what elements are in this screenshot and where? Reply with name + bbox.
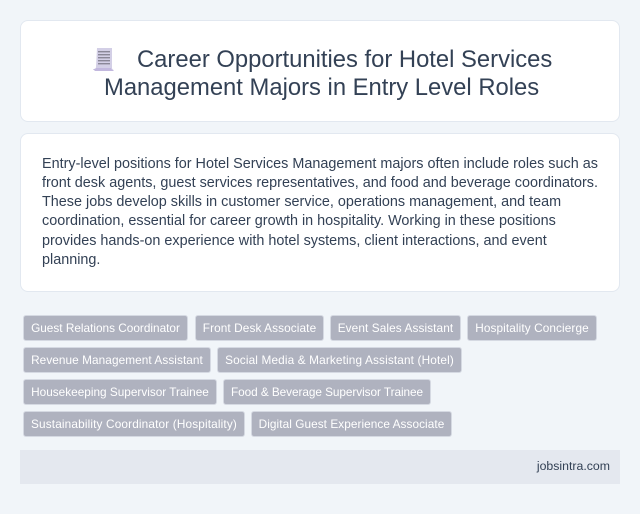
tag: Digital Guest Experience Associate [259, 417, 444, 431]
description text [42, 156, 598, 268]
tag: Revenue Management Assistant [31, 353, 203, 367]
description text: provides hands-on experience with hotel systems, client interactions, and event [42, 233, 547, 249]
tag: Hospitality Concierge [475, 321, 589, 335]
tag [23, 411, 245, 437]
tag [23, 315, 188, 341]
title line 2: Management Majors in Entry Level Roles [104, 74, 539, 101]
tag [223, 379, 431, 405]
description text: Entry-level positions for Hotel Services Management majors often include roles such as [42, 156, 598, 172]
title line 1: Career Opportunities for Hotel Services [137, 46, 552, 73]
description text: planning. [42, 252, 100, 268]
tag [467, 315, 597, 341]
tag [330, 315, 461, 341]
panel: description card [20, 133, 620, 292]
tag [23, 379, 217, 405]
tag: Social Media & Marketing Assistant (Hotel) [225, 353, 454, 367]
panel: job role tags [23, 315, 597, 437]
tag [217, 347, 462, 373]
tag: Food & Beverage Supervisor Trainee [231, 385, 423, 399]
footer source text: jobsintra.com [537, 459, 610, 473]
panel: title card [20, 20, 620, 122]
tag: Front Desk Associate [203, 321, 316, 335]
tag: Housekeeping Supervisor Trainee [31, 385, 209, 399]
tag: Sustainability Coordinator (Hospitality) [31, 417, 237, 431]
tag [251, 411, 452, 437]
tag [23, 347, 211, 373]
tag: Guest Relations Coordinator [31, 321, 180, 335]
tag [195, 315, 324, 341]
description text: coordination, essential for career growth in hospitality. Working in these positions [42, 213, 556, 229]
description text: front desk agents, guest services representatives, and food and beverage coordinators. [42, 175, 598, 191]
tag: Event Sales Assistant [338, 321, 453, 335]
description text: These jobs develop skills in customer service, operations management, and team [42, 194, 561, 210]
icon: paper receipt [93, 48, 114, 71]
footer bar [20, 450, 620, 484]
